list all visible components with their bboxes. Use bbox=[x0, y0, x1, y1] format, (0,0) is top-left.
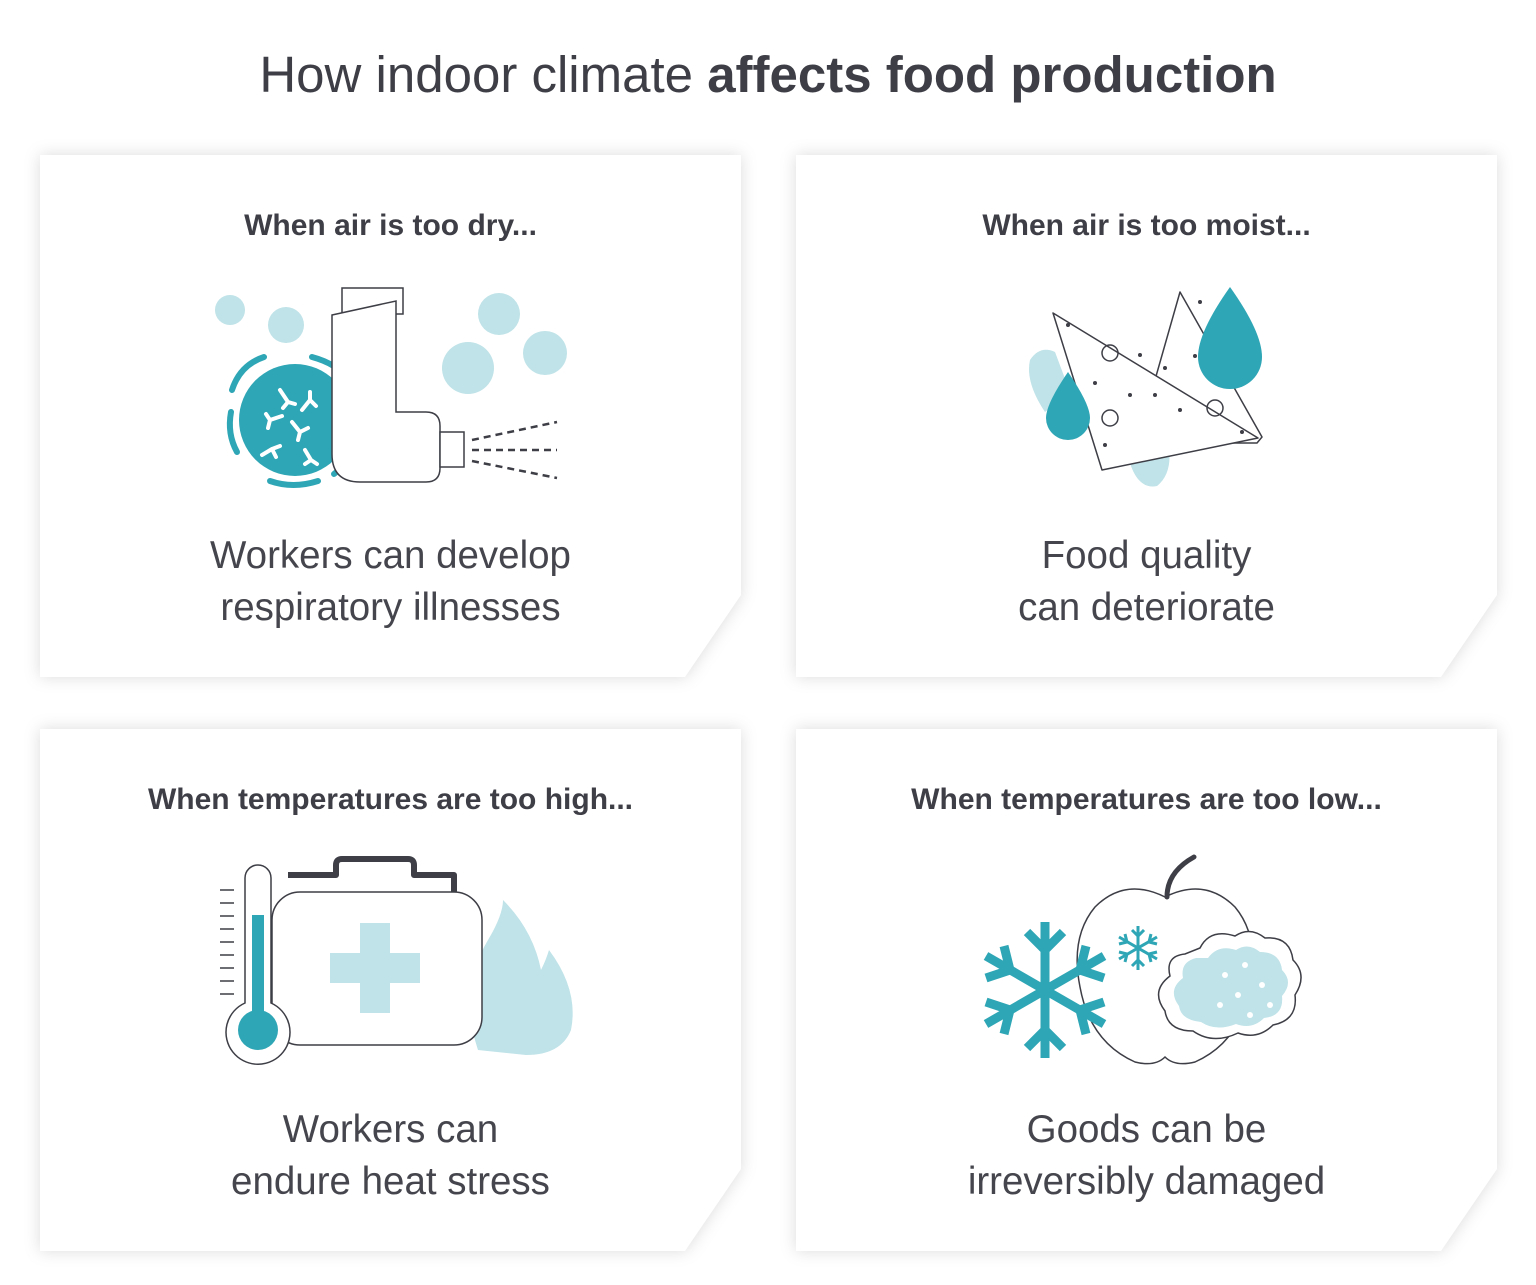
text: food quality: Food quality bbox=[1042, 534, 1251, 577]
title: How indoor climate affects food production bbox=[259, 46, 1277, 103]
text: food quality bbox=[1020, 540, 1274, 620]
icon: soggy crackers with drops bbox=[1029, 287, 1262, 486]
text: damaged goods bbox=[970, 1114, 1323, 1202]
text: heat stress: Workers can bbox=[283, 1108, 498, 1151]
text: respiratory bbox=[210, 540, 570, 628]
heading: dry: When air is too dry... bbox=[244, 209, 537, 242]
text: food quality: can deteriorate bbox=[1018, 586, 1275, 629]
text: heat stress: endure heat stress bbox=[231, 1160, 550, 1203]
panel: low temperature bbox=[790, 724, 1502, 1256]
panel: moist air bbox=[790, 150, 1502, 682]
panel: high temperature bbox=[34, 724, 746, 1256]
icon: frozen apple with snowflakes and mold bbox=[986, 857, 1301, 1064]
text: heat stress bbox=[232, 1114, 548, 1194]
text: damaged goods: irreversibly damaged bbox=[968, 1160, 1325, 1203]
text: damaged goods: Goods can be bbox=[1027, 1108, 1266, 1151]
icon: thermometer and first aid kit with flame bbox=[220, 859, 573, 1064]
text: respiratory: respiratory illnesses bbox=[220, 586, 561, 629]
icon: inhaler and virus bbox=[215, 288, 567, 485]
heading: moist: When air is too moist... bbox=[982, 209, 1311, 242]
panel: dry air bbox=[34, 150, 746, 682]
heading: high: When temperatures are too high... bbox=[148, 783, 633, 816]
heading: low: When temperatures are too low... bbox=[911, 783, 1382, 816]
text: respiratory: Workers can develop bbox=[210, 534, 571, 577]
